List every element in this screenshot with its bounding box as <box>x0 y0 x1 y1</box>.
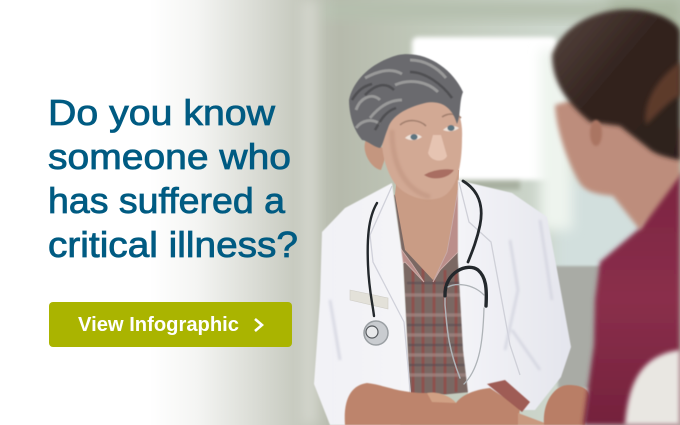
foreground cushion <box>625 350 680 425</box>
patient maroon top <box>583 172 680 425</box>
heading: Do you know <box>48 92 276 133</box>
clasped hands <box>345 380 589 425</box>
stethoscope <box>364 181 486 384</box>
patient <box>552 9 680 425</box>
icon: chevron <box>255 319 262 331</box>
patient ear <box>590 120 602 146</box>
doctor ear <box>365 140 388 170</box>
hair clip <box>645 62 680 125</box>
shirt <box>394 190 470 398</box>
shirt collar <box>393 190 458 282</box>
patient hair <box>552 9 680 160</box>
doctor neck <box>395 165 459 280</box>
name badge <box>350 290 388 309</box>
doctor face <box>382 96 462 200</box>
button: view infographic <box>49 302 292 347</box>
doctor <box>314 54 571 425</box>
white coat <box>314 180 571 425</box>
heading: has suffered a <box>48 180 286 221</box>
patient neck and face <box>555 90 680 230</box>
heading <box>48 92 298 265</box>
button: view infographic: View Infographic <box>78 314 239 336</box>
heading: someone who <box>48 136 291 177</box>
doctor hair <box>349 54 463 148</box>
sofa <box>555 266 612 388</box>
heading: critical illness? <box>48 224 298 265</box>
